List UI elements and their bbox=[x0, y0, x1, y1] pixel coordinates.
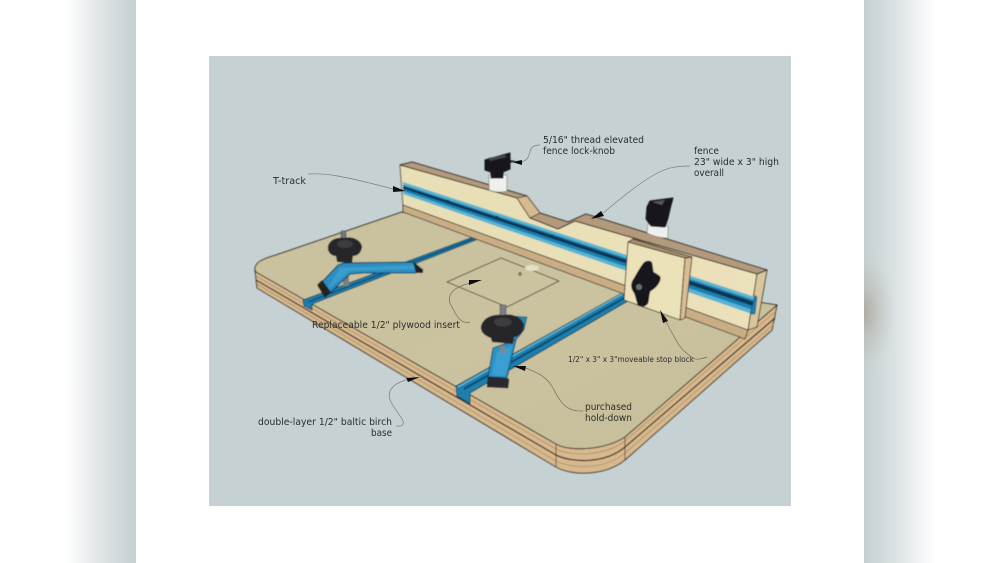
insert access hole bbox=[525, 265, 539, 271]
clamp knob bbox=[328, 237, 362, 263]
left base T-track bbox=[303, 237, 476, 310]
fence curved cut-out face bbox=[517, 196, 540, 218]
insert screw bbox=[518, 272, 522, 276]
plywood insert bbox=[447, 258, 559, 307]
left elevated lock-knob bbox=[485, 153, 516, 192]
callout: hold-down: hold-down bbox=[585, 413, 632, 424]
callout: fence: 23" wide x 3" high bbox=[694, 157, 779, 168]
callout: lock knob: fence lock-knob bbox=[543, 146, 615, 157]
fence top strip bbox=[400, 162, 767, 274]
stop block bbox=[624, 239, 692, 320]
fence lower board bbox=[403, 205, 748, 339]
callout: stop block bbox=[568, 310, 707, 364]
right hold-down clamp bbox=[481, 305, 527, 388]
fence end face bbox=[748, 270, 767, 330]
clamp body bbox=[488, 340, 516, 378]
callout: plywood insert bbox=[312, 280, 482, 331]
clamp stud bbox=[500, 305, 506, 322]
base side layers bbox=[255, 270, 777, 473]
stop block knob bbox=[632, 261, 660, 306]
callout: stop block: 1/2" x 3" x 3"moveable stop block bbox=[568, 355, 694, 364]
callout: hold-down: purchased bbox=[585, 402, 632, 413]
clamp knob bbox=[481, 314, 524, 344]
callout: base: base bbox=[371, 428, 392, 439]
callout: base: double-layer 1/2" baltic birch bbox=[258, 417, 392, 428]
clamp back plate bbox=[512, 316, 527, 344]
fence T-track bbox=[403, 182, 757, 314]
callout: hold-down bbox=[513, 366, 632, 424]
panel: diagram backdrop bbox=[209, 56, 791, 506]
clamp tip bbox=[487, 377, 509, 388]
fence front face bbox=[400, 165, 757, 330]
fence assembly bbox=[400, 162, 767, 339]
clamp tips bbox=[317, 280, 331, 298]
callout: plywood insert: Replaceable 1/2" plywood insert bbox=[312, 320, 460, 331]
illustration: router table bbox=[255, 153, 777, 473]
callout: fence bbox=[591, 146, 779, 219]
callout: T-track bbox=[272, 174, 405, 192]
callout: fence: overall bbox=[694, 168, 724, 179]
callout: fence: fence bbox=[694, 146, 719, 157]
right base T-track bbox=[456, 292, 628, 404]
callout: T-track: T-track bbox=[272, 176, 306, 187]
clamp arm bbox=[322, 262, 423, 295]
left blurred side band bbox=[65, 0, 136, 563]
callout: base bbox=[258, 377, 420, 439]
callout: lock knob: 5/16" thread elevated bbox=[543, 135, 644, 146]
right blurred side band bbox=[864, 0, 926, 563]
clamp stud bbox=[341, 231, 346, 245]
callout: lock knob bbox=[512, 135, 644, 165]
left hold-down clamp bbox=[317, 231, 423, 298]
right elevated lock-knob bbox=[646, 198, 673, 238]
base top surface bbox=[255, 212, 777, 449]
